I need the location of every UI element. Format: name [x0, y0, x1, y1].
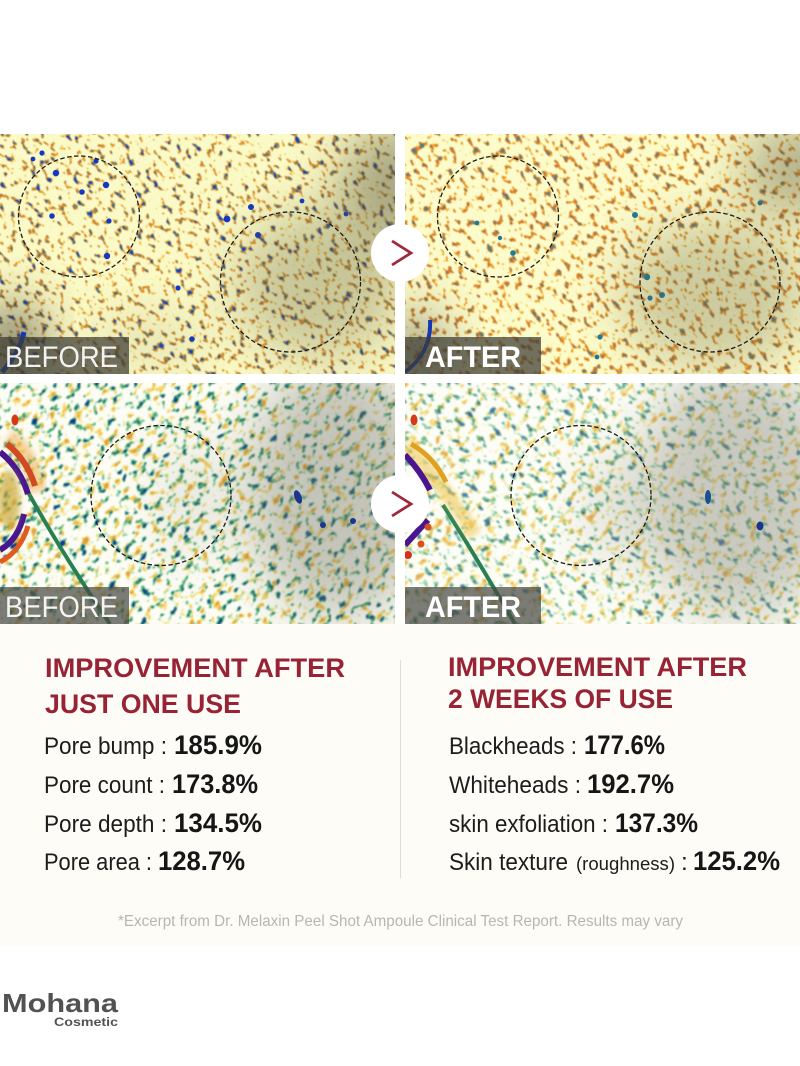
- list: one-use results: Pore depth :: [44, 811, 167, 838]
- panel: results background: [0, 624, 800, 946]
- heading: improvement after two weeks: [448, 652, 747, 714]
- list: one-use results: [44, 730, 262, 876]
- logo: Mohana Cosmetic: Cosmetic: [54, 1015, 118, 1029]
- footnote: *Excerpt from Dr. Melaxin Peel Shot Ampoule Clinical Test Report. Results may vary: [118, 913, 683, 930]
- heading: improvement after two weeks: IMPROVEMENT AFTER: [448, 652, 747, 682]
- label: after, top: AFTER: [425, 341, 521, 374]
- list: two-week results: Blackheads :: [449, 733, 577, 760]
- photo: bottom-right pore scan after: [405, 383, 800, 624]
- list: two-week results: 177.6%: [584, 730, 665, 760]
- list: two-week results: 125.2%: [693, 846, 780, 876]
- heading: improvement after one use: IMPROVEMENT AFTER: [45, 653, 345, 683]
- list: two-week results: skin exfoliation :: [449, 811, 608, 838]
- list: one-use results: 134.5%: [174, 808, 262, 838]
- list: one-use results: 173.8%: [172, 769, 258, 799]
- logo: Mohana Cosmetic: Mohana: [2, 988, 119, 1018]
- icon: arrow button, top: [371, 224, 429, 282]
- heading: improvement after two weeks: 2 WEEKS OF USE: [448, 684, 673, 714]
- photo: top-right pore scan after: [405, 134, 800, 374]
- list: one-use results: Pore bump :: [44, 733, 167, 760]
- label: before, bottom: BEFORE: [5, 591, 118, 624]
- heading: improvement after one use: JUST ONE USE: [45, 689, 241, 719]
- photo: bottom-left pore scan before: [0, 383, 395, 624]
- divider: [400, 660, 401, 878]
- list: one-use results: 185.9%: [174, 730, 262, 760]
- logo: Mohana Cosmetic: [2, 988, 119, 1029]
- list: one-use results: 128.7%: [158, 846, 245, 876]
- list: two-week results: 192.7%: [587, 769, 674, 799]
- label: after, bottom: AFTER: [425, 591, 521, 624]
- dashed circles: highlighted scan regions: [18, 156, 780, 566]
- list: two-week results: :: [681, 849, 688, 876]
- list: one-use results: Pore area :: [44, 849, 152, 876]
- photo: top-left pore scan before: [0, 134, 395, 374]
- heading: improvement after one use: [45, 653, 345, 719]
- list: two-week results: Skin texture: [449, 849, 568, 876]
- list: two-week results: [449, 730, 780, 876]
- icon: arrow button, bottom: [371, 475, 429, 533]
- label: before, top: BEFORE: [5, 341, 118, 374]
- list: two-week results: 137.3%: [615, 808, 698, 838]
- list: one-use results: Pore count :: [44, 772, 165, 799]
- label: after, bottom: [405, 587, 541, 624]
- list: two-week results: Whiteheads :: [449, 772, 581, 799]
- list: two-week results: (roughness): [576, 854, 675, 874]
- label: after, top: [405, 337, 541, 374]
